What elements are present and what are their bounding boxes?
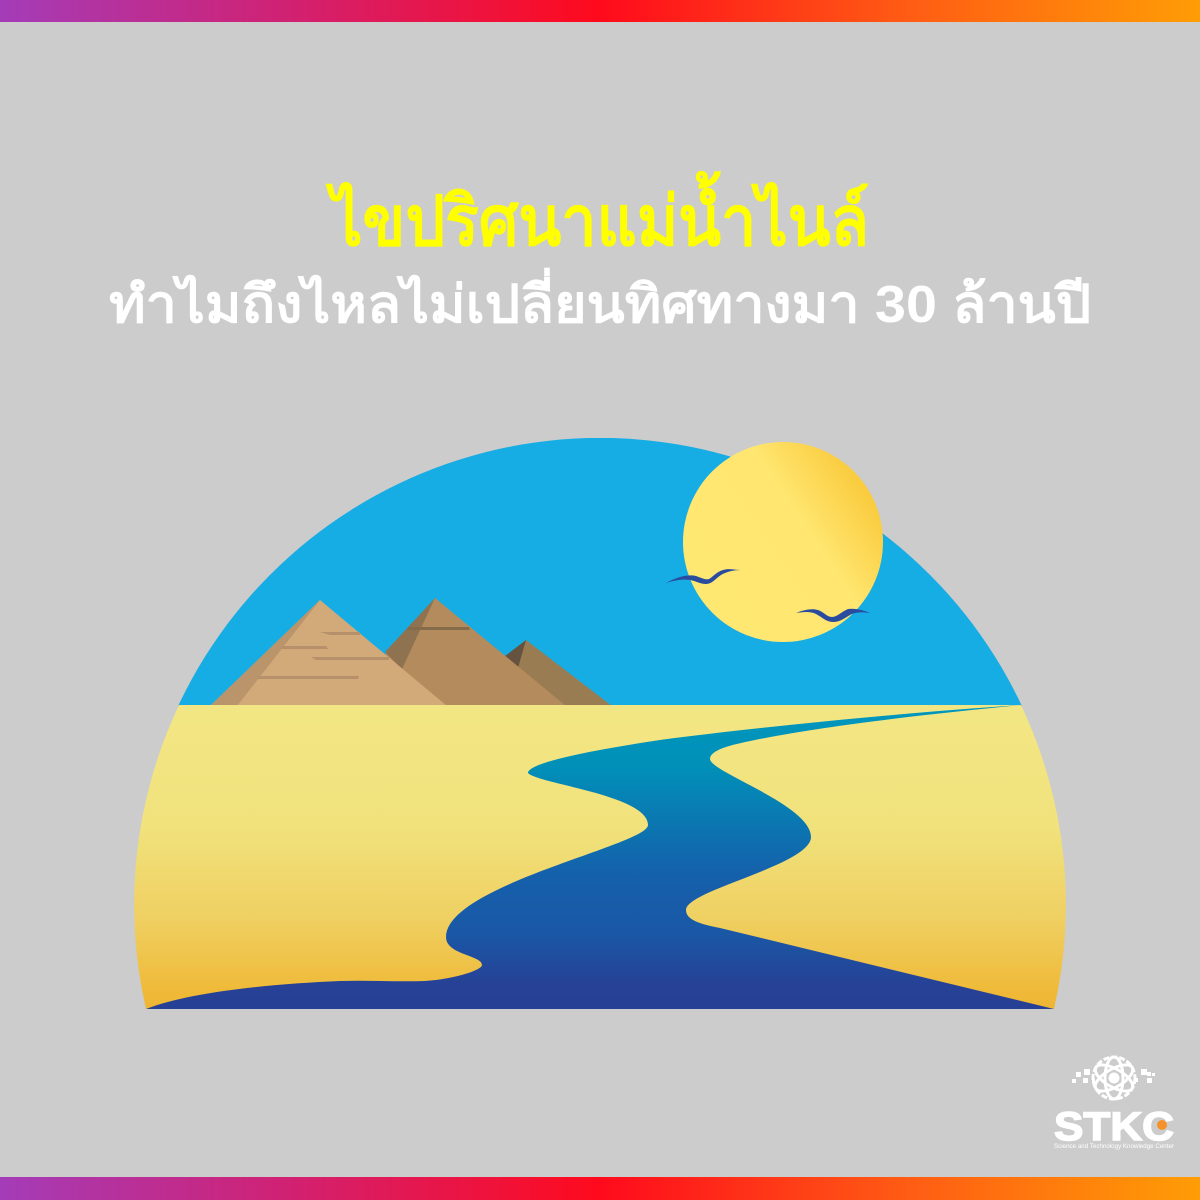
bottom gradient bar: [0, 1177, 1200, 1200]
pyramid: back right: [480, 640, 612, 706]
title: yellow heading: ไขปริศนาแม่น้ำไนล์: [325, 170, 869, 260]
illustration: Nile landscape: [134, 438, 1066, 1009]
top gradient bar: [0, 0, 1200, 22]
river: [146, 705, 1054, 1009]
bird right: [796, 609, 870, 622]
icon: atom network: [1091, 1057, 1137, 1099]
pyramid: front: [210, 600, 447, 706]
wordmark: STKC: [1054, 1105, 1174, 1149]
orange dot: [1157, 1120, 1167, 1130]
sun: [683, 442, 883, 642]
logo: STKC: [1054, 1057, 1174, 1150]
sky: [134, 438, 1066, 706]
icon: pixel squares: [1072, 1069, 1155, 1083]
subtitle: white heading: ทำไมถึงไหลไม่เปลี่ยนทิศทางมา 30 ล้านปี: [109, 268, 1091, 334]
sand: [134, 705, 1066, 1009]
pyramid: middle: [340, 598, 566, 706]
tagline: Science and Technology Knowledge Center: [1054, 1144, 1174, 1150]
bird left: [666, 569, 741, 584]
